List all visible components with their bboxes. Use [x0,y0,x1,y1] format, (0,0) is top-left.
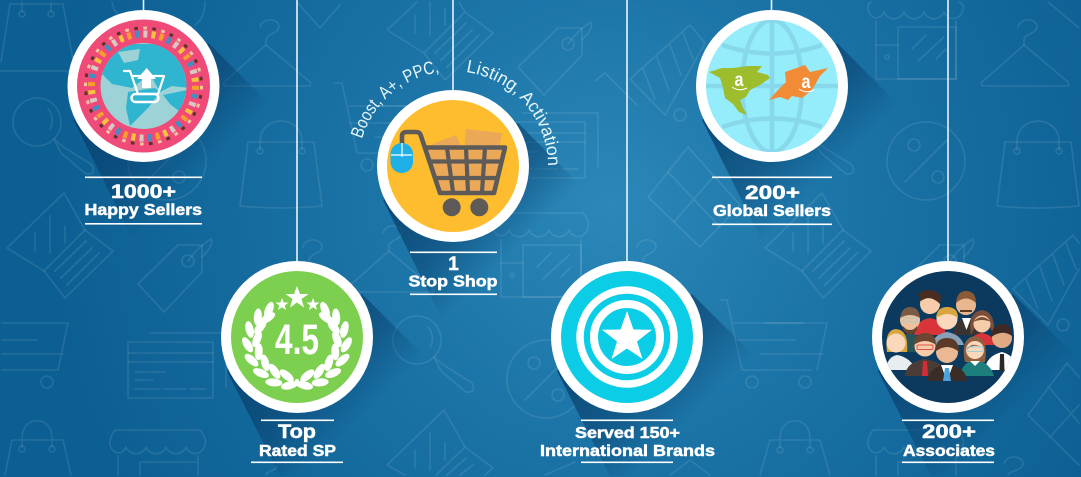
hanging string [452,0,454,92]
stat label: 1 Stop Shop [408,252,498,295]
hanging string [142,0,144,12]
stat label: 200+ Associates [902,420,995,463]
stat label: Served 150+ International Brands [540,420,715,463]
icon: globe with amazon continents: a [802,72,811,93]
icon: globe with amazon continents [696,10,848,162]
panel: global sellers [696,0,848,225]
stat label: 1000+ Happy Sellers: Happy Sellers [84,202,202,219]
icon: shopping cart with mouse [377,90,529,242]
hanging string [770,0,772,12]
stat label: 200+ Global Sellers: 200+ [745,183,800,204]
hanging string [626,0,628,263]
stat label: Served 150+ International Brands: Served 150+ [575,425,680,442]
stat label: Served 150+ International Brands: International Brands [540,443,715,460]
icon: globe with ring of people and cart [68,10,220,162]
stat label: 1000+ Happy Sellers: 1000+ [111,182,176,203]
stat label: 1 Stop Shop: Stop Shop [408,274,498,290]
stat label: 200+ Associates: Associates [903,443,995,460]
icon: laurel wreath with 4.5 rating: 4.5 [275,316,319,364]
panel: one stop shop [350,0,558,296]
icon: shield with star [551,261,703,413]
curved caption: Listing, Activation [467,60,558,165]
stat label: Top Rated SP: Rated SP [259,443,336,460]
stat label: Top Rated SP: Top [278,422,316,443]
panel: top rated [221,0,373,463]
panel: associates [872,0,1024,463]
stat label: 1000+ Happy Sellers [84,176,202,225]
stat label: 1 Stop Shop: 1 [448,254,459,275]
icon: laurel wreath with 4.5 rating [221,261,373,413]
stat label: 200+ Global Sellers: Global Sellers [713,203,831,220]
icon: group of associates [872,261,1024,413]
curved caption: Boost, A+, PPC, [350,62,438,138]
panel: international brands [540,0,715,463]
hanging string [296,0,298,263]
hanging string [947,0,949,263]
icon: globe with amazon continents: a [734,70,744,91]
stat label: 200+ Associates: 200+ [922,422,976,443]
stat label: 200+ Global Sellers [712,176,832,225]
curved caption [350,60,558,165]
panel: happy sellers [68,0,220,225]
stat label: Top Rated SP [251,420,343,463]
